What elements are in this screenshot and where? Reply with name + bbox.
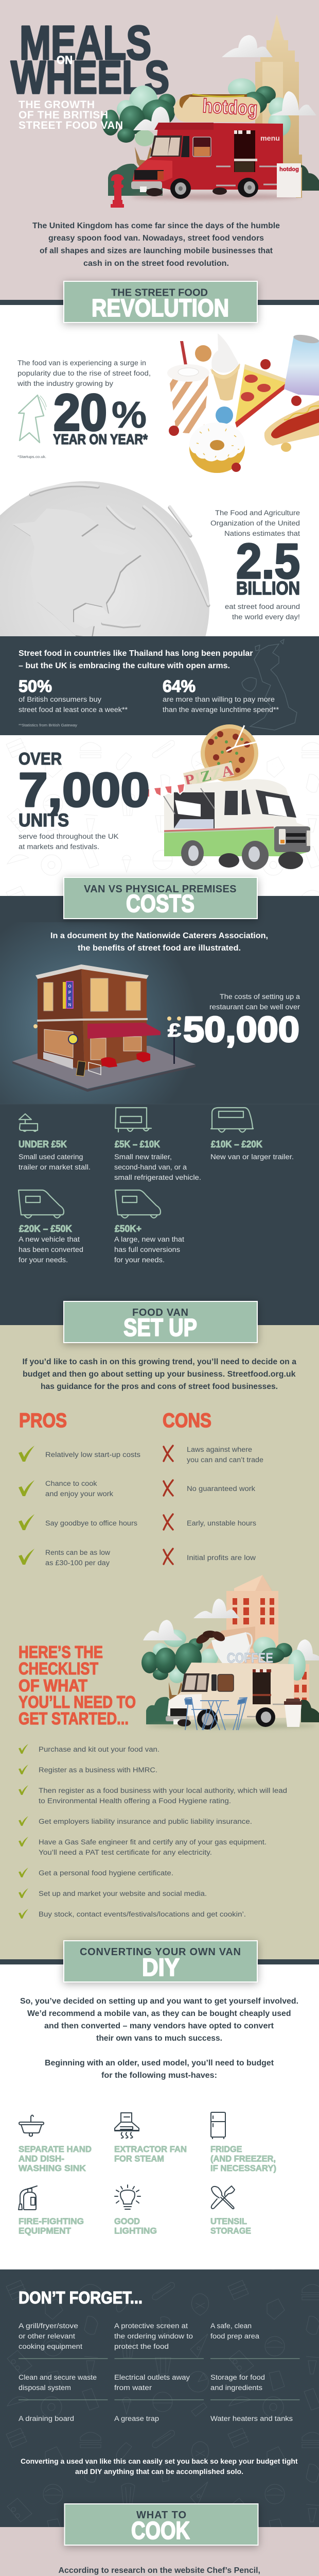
must-have: sink	[19, 2115, 92, 2173]
icon: growth arrow	[19, 395, 46, 443]
icon: cloud	[271, 91, 316, 115]
checklist item	[19, 1744, 160, 1754]
heading card: converting your own van DIY: DIY	[142, 1954, 180, 1981]
text block: food van surge: with the industry growing by	[17, 380, 113, 387]
heading card: what to cook: COOK	[131, 2517, 190, 2545]
stat: 64 percent	[163, 677, 279, 714]
cost tier: 5k to 10k	[114, 1108, 201, 1181]
bushes	[146, 1697, 319, 1724]
text block: set up intro	[23, 1358, 296, 1391]
text block: intro	[32, 222, 280, 268]
item	[210, 2322, 260, 2340]
roof	[36, 964, 149, 979]
panel: header background	[0, 0, 319, 300]
heading: checklist: HERE’S THE	[19, 1642, 103, 1662]
stat: 50000 pounds: £	[168, 1020, 181, 1041]
icon: van	[19, 1190, 64, 1218]
heading card: converting your own van DIY	[64, 1941, 257, 1982]
text block: set up intro: has guidance for the pros and cons of street food businesses.	[41, 1382, 278, 1391]
heading: checklist: YOU’LL NEED TO	[19, 1692, 136, 1711]
van body	[164, 779, 310, 834]
icon: fridge	[211, 2112, 225, 2139]
illustration: floating food	[164, 333, 319, 473]
checklist item: You’ll need a PAT test certificate for any electricity.	[39, 1849, 212, 1856]
text block: UK statement	[19, 649, 253, 670]
stat: over 7000 units: UNITS	[19, 810, 69, 831]
text block: budget advice: and DIY anything that can be accomplished solo.	[75, 2468, 243, 2476]
panel: revolution white background	[0, 305, 319, 636]
icon: cloud	[193, 1599, 240, 1618]
egg ball	[195, 345, 211, 362]
stat: 50 percent: street food at least once a week**	[19, 706, 128, 714]
van windows	[224, 789, 296, 818]
cost tier: 20k to 50k: A new vehicle that	[19, 1235, 80, 1243]
pro item: Rents can be as low	[45, 1549, 110, 1556]
stat: over 7000 units: OVER	[19, 749, 62, 768]
con item	[164, 1549, 256, 1564]
text block: serve food: at markets and festivals.	[19, 843, 99, 851]
trees	[141, 1630, 306, 1703]
must-have: utensil storage: UTENSIL	[210, 2216, 247, 2226]
pizza on roof	[201, 724, 258, 782]
soda can	[284, 333, 319, 396]
cream van	[166, 1663, 294, 1730]
cost tier: 20k to 50k: £20K – £50K	[19, 1224, 72, 1234]
text block: DIY intro: and then converted – many vendors have opted to convert	[44, 2022, 274, 2030]
must-have: fire fighting equipment: EQUIPMENT	[19, 2226, 72, 2236]
pro item: as £30-100 per day	[45, 1559, 110, 1567]
text block: intro: greasy spoon food van. Nowadays, street food vendors	[48, 234, 264, 243]
con item: you can and can’t trade	[187, 1456, 263, 1464]
list: cons	[163, 1410, 263, 1564]
text block: DIY intro: We’d recommend a mobile van, as they can be bought cheaply used	[27, 2009, 291, 2018]
heading card: van vs physical premises costs: VAN VS PHYSICAL PREMISES	[84, 884, 237, 895]
text block: FAO estimate: Nations estimates that	[224, 530, 300, 537]
red balls	[169, 359, 302, 472]
subtitle: THE GROWTH	[19, 99, 95, 111]
item: protect the food	[114, 2343, 169, 2350]
must-have: fridge: FRIDGE	[210, 2144, 242, 2154]
text block: UK statement: – but the UK is embracing the culture with open arms.	[19, 662, 230, 670]
walls	[38, 969, 84, 1070]
text block: DIY intro: So, you’ve decided on setting up and you want to get yourself involved.	[20, 1997, 298, 2006]
checklist item	[19, 1909, 246, 1919]
text block: budget advice	[21, 2458, 298, 2476]
tree right	[228, 78, 291, 137]
icon: bus	[211, 1108, 253, 1132]
text block: food van surge: popularity due to the rise of street food,	[17, 369, 151, 377]
heading: cons: CONS	[163, 1410, 211, 1432]
must-have: fridge	[210, 2112, 276, 2173]
heading card: food van set up: FOOD VAN	[132, 1307, 188, 1318]
stat: over 7000 units: 7,000	[19, 763, 150, 817]
icon: red food van: menu	[260, 134, 280, 142]
awning	[145, 784, 185, 798]
cost tier: 5k to 10k: second-hand van, or a	[114, 1163, 187, 1171]
checklist item: Get a personal food hygiene certificate.	[39, 1869, 173, 1877]
cost tier: 50k plus: £50K+	[115, 1224, 141, 1234]
text block: FAO estimate: The Food and Agriculture	[215, 509, 300, 517]
text block: DIY intro: their own vans to much success.	[96, 2034, 222, 2043]
subtitle: STREET FOOD VAN	[19, 120, 123, 131]
title: WHEELS	[11, 52, 169, 104]
must-have: good lighting: LIGHTING	[114, 2226, 157, 2236]
cost tier: 5k to 10k: small refrigerated vehicle.	[114, 1174, 201, 1181]
heading: checklist: GET STARTED...	[19, 1709, 129, 1728]
text block: serve food	[19, 833, 119, 851]
ice cream	[210, 333, 240, 401]
icon: cloud	[133, 107, 172, 130]
pro item	[19, 1446, 140, 1462]
icon: cloud	[222, 35, 273, 57]
footnote: startups: *Startups.co.uk.	[17, 454, 46, 459]
must-have: extractor fan: EXTRACTOR FAN	[114, 2144, 187, 2154]
panel: 7000 units patterned background	[0, 735, 319, 896]
text block: caterers association: In a document by the Nationwide Caterers Association,	[50, 931, 268, 940]
con item	[164, 1514, 256, 1530]
heading card: converting your own van DIY: CONVERTING YOUR OWN VAN	[80, 1946, 241, 1958]
open neon sign: O	[68, 984, 72, 989]
item	[114, 2322, 193, 2350]
cost tier: 5k to 10k: Small new trailer,	[114, 1153, 172, 1161]
tables	[101, 1052, 150, 1067]
blue ball	[216, 406, 233, 424]
text block: favourite dishes: According to research on the website Chef’s Pencil,	[59, 2566, 260, 2575]
pro item	[19, 1549, 110, 1567]
list: don't forget items	[19, 2322, 293, 2422]
ground shadow	[147, 1723, 316, 1728]
cost tier: under 5k: trailer or market stall.	[19, 1163, 91, 1171]
checklist item: Purchase and kit out your food van.	[39, 1745, 160, 1753]
icon: fire extinguisher	[19, 2186, 37, 2210]
text block: intro: of all shapes and sizes are launching mobile businesses that	[40, 246, 273, 256]
stat: 20 percent: %	[112, 395, 147, 436]
item: A draining board	[19, 2415, 74, 2422]
heading card: street food revolution: THE STREET FOOD	[111, 287, 208, 299]
must-have: utensil storage: STORAGE	[210, 2226, 251, 2236]
icon: spoon and fork	[211, 2186, 235, 2209]
con item: Laws against where	[187, 1446, 252, 1453]
text block: DIY intro	[20, 1997, 298, 2080]
must-have: good lighting	[114, 2185, 157, 2236]
wheels	[181, 840, 303, 870]
stat: over 7000 units	[19, 749, 150, 831]
pro item	[19, 1514, 137, 1530]
checklist item	[19, 1837, 267, 1856]
striped cup	[167, 364, 209, 433]
ground shadow	[131, 194, 301, 200]
straw	[180, 341, 188, 371]
icon: giant hotdog on roof	[174, 94, 260, 122]
con item	[164, 1480, 255, 1496]
text block: eat street food: the world every day!	[232, 613, 300, 621]
stat: 64 percent: 64%	[163, 677, 196, 696]
heading card: street food revolution: REVOLUTION	[92, 295, 229, 322]
con item: No guaranteed work	[187, 1485, 255, 1493]
cost tier: 50k plus: has full conversions	[114, 1246, 180, 1253]
footnote: british gateway: **Statistics from British Gateway	[19, 723, 77, 727]
stat: 50000 pounds: 50,000	[183, 1009, 299, 1049]
serving hatch	[164, 788, 215, 828]
text block: restaurant cost: restaurant can be well over	[209, 1003, 300, 1011]
stat: 20 percent	[53, 384, 148, 447]
stat: 2.5 billion: BILLION	[236, 578, 300, 599]
item	[19, 2374, 97, 2392]
con item: Initial profits are low	[187, 1554, 256, 1562]
heading: checklist: OF WHAT	[19, 1676, 87, 1695]
illustration: hotdog van scene	[102, 14, 319, 208]
cost tier: 20k to 50k: for your needs.	[19, 1256, 68, 1264]
upper windows	[44, 978, 140, 1011]
pro item: Say goodbye to office hours	[45, 1519, 137, 1527]
checklist item: Then register as a food business with your local authority, which will lead	[39, 1787, 287, 1794]
stat: 20 percent: YEAR ON YEAR*	[53, 431, 148, 447]
panel: costs dark background	[0, 896, 319, 1325]
illustration: coffee van scene	[141, 1575, 319, 1730]
title: MEALS	[20, 16, 151, 70]
cost tier: 10k to 20k	[210, 1108, 294, 1161]
cost tier: 50k plus: for your needs.	[114, 1256, 165, 1264]
title	[11, 16, 169, 104]
text block: budget advice: Converting a used van like this can easily set you back so keep your budget tight	[21, 2458, 298, 2466]
item: the ordering window to	[114, 2332, 193, 2340]
checklist item	[19, 1765, 157, 1774]
pizza slice	[235, 364, 290, 428]
stat: 50 percent: 50%	[19, 677, 52, 696]
cost tier: 10k to 20k: £10K – £20K	[211, 1139, 262, 1149]
cornice	[37, 1019, 148, 1021]
cost tier: 20k to 50k	[19, 1190, 83, 1264]
pizza sign: PIZZA	[183, 762, 235, 789]
pro item	[19, 1480, 113, 1498]
stat: 64 percent: are more than willing to pay more	[163, 696, 275, 703]
text block: eat street food: eat street food around	[225, 603, 300, 611]
icon: hotdog A-board sign	[277, 163, 302, 198]
open neon sign: N	[68, 1003, 72, 1007]
checklist item: Register as a business with HMRC.	[39, 1766, 157, 1774]
stat: 2.5 billion: 2.5	[236, 534, 300, 589]
subtitle: OF THE BRITISH	[19, 109, 108, 121]
bistro table and chairs	[185, 1698, 247, 1730]
icon: light bulb	[115, 2185, 140, 2209]
illustration: pizza van	[145, 724, 310, 870]
checklist item	[19, 1888, 207, 1898]
item: Clean and secure waste	[19, 2374, 97, 2381]
cost tier: 5k to 10k: £5K – £10K	[115, 1139, 160, 1149]
text block: eat street food	[225, 603, 300, 621]
icon: cloud	[289, 1639, 319, 1660]
text block: caterers association: the benefits of street food are illustrated.	[78, 944, 241, 953]
text block: food van surge	[17, 359, 151, 387]
cost tier: under 5k: UNDER £5K	[19, 1139, 67, 1149]
list: checklist	[19, 1744, 287, 1919]
stat: 64 percent: than the average lunchtime spend**	[163, 706, 279, 714]
platform	[12, 1061, 196, 1092]
illustration: globe	[0, 481, 210, 636]
text block: FAO estimate	[210, 509, 300, 537]
must-have: fridge: IF NECESSARY)	[210, 2163, 276, 2173]
icon: red food van	[131, 123, 283, 199]
con item: Early, unstable hours	[187, 1519, 256, 1527]
must-have: sink: SEPARATE HAND	[19, 2144, 92, 2154]
stat: 20 percent: 20	[54, 384, 107, 442]
donut	[189, 422, 245, 473]
text block: serve food: serve food throughout the UK	[19, 833, 119, 840]
must-have: sink: AND DISH-	[19, 2154, 64, 2164]
subtitle	[19, 99, 123, 131]
item: A safe, clean	[210, 2322, 252, 2330]
must-have: utensil storage	[210, 2186, 251, 2236]
stat: 50 percent: of British consumers buy	[19, 696, 101, 703]
illustration: restaurant building	[12, 964, 196, 1092]
checklist item: Have a Gas Safe engineer fit and certify any of your gas equipment.	[39, 1838, 267, 1846]
must-have: extractor fan: FOR STEAM	[114, 2154, 164, 2164]
icon: UK map outline	[242, 639, 297, 730]
item	[114, 2374, 190, 2392]
icon: fire hydrant	[111, 174, 124, 208]
must-have: extractor fan	[114, 2113, 187, 2164]
must-have: fire fighting equipment: FIRE-FIGHTING	[19, 2216, 84, 2226]
open neon sign: P	[68, 990, 72, 995]
text block: set up intro: budget and then go about setting up your business. Streetfood.org.uk	[23, 1370, 296, 1379]
panel: DIY white background	[0, 1964, 319, 2269]
icon: hotdog A-board sign: hotdog	[279, 166, 299, 173]
checklist item	[19, 1785, 287, 1805]
heading: checklist	[19, 1642, 136, 1728]
item: food prep area	[210, 2332, 260, 2340]
cost tier: under 5k: Small used catering	[19, 1153, 83, 1161]
cost tier: 50k plus: A large, new van that	[114, 1235, 184, 1243]
heading card: street food revolution	[64, 281, 257, 323]
cost tier: 50k plus	[114, 1190, 184, 1264]
panel: UK stats dark background	[0, 636, 319, 735]
hotdog	[264, 400, 319, 452]
item: or other relevant	[19, 2332, 75, 2340]
item: Storage for food	[210, 2374, 265, 2381]
heading: pros: PROS	[19, 1410, 67, 1432]
awning	[87, 1023, 161, 1039]
takeaway cup	[284, 1699, 302, 1727]
tree left	[102, 86, 175, 168]
text block: food van surge: The food van is experiencing a surge in	[17, 359, 146, 367]
checklist item	[19, 1868, 173, 1877]
icon: sink	[19, 2115, 44, 2136]
text block: DIY intro: Beginning with an older, used model, you’ll need to budget	[45, 2059, 274, 2067]
icon: giant hotdog on roof: hotdog	[202, 95, 258, 120]
stat: 50 percent	[19, 677, 128, 714]
checklist item: Buy stock, contact events/festivals/locations and get cookin’.	[39, 1910, 246, 1918]
list: pros	[19, 1410, 140, 1567]
checklist item: to Environmental Health offering a Food Hygiene rating.	[39, 1797, 231, 1805]
buildings	[206, 1575, 309, 1708]
text block: DIY intro: for the following must-haves:	[101, 2071, 217, 2080]
heading card: what to cook	[65, 2504, 258, 2545]
must-have: good lighting: GOOD	[114, 2216, 140, 2226]
text block: intro: The United Kingdom has come far since the days of the humble	[32, 222, 280, 230]
panel: don't forget dark background	[0, 2269, 319, 2527]
text block: intro: cash in on the street food revolution.	[83, 259, 229, 268]
item: cooking equipment	[19, 2343, 82, 2350]
item: A grill/fryer/stove	[19, 2322, 78, 2330]
con item	[164, 1446, 263, 1464]
bushes	[108, 164, 319, 196]
icon: coffee cup and beans	[194, 1630, 252, 1663]
checklist item	[19, 1816, 252, 1826]
text block: restaurant cost: The costs of setting up a	[220, 993, 300, 1001]
icon: market cart	[19, 1114, 38, 1131]
heading card: food van set up: SET UP	[123, 1314, 197, 1342]
text block: restaurant cost	[209, 993, 300, 1011]
item: Water heaters and tanks	[210, 2415, 293, 2422]
item: from water	[114, 2384, 152, 2392]
heading card: what to cook: WHAT TO	[136, 2510, 186, 2521]
checklist item: Set up and market your website and social media.	[39, 1890, 207, 1897]
ground floor windows	[44, 1029, 141, 1060]
icon: extractor hood	[115, 2113, 139, 2138]
item	[210, 2374, 265, 2392]
text block: set up intro: If you’d like to cash in on this growing trend, you’ll need to decide on a	[23, 1358, 296, 1366]
checklist item: Get employers liability insurance and public liability insurance.	[39, 1818, 252, 1825]
pro item: Chance to cook	[45, 1480, 97, 1487]
cost tier: under 5k	[19, 1114, 91, 1171]
title: ON	[57, 54, 73, 66]
open neon sign: E	[68, 996, 72, 1001]
icon: trailer	[115, 1108, 151, 1132]
text block: UK statement: Street food in countries like Thailand has long been popular	[19, 649, 253, 658]
must-have: fire fighting equipment	[19, 2186, 84, 2236]
panel: set up khaki background	[0, 1325, 319, 1959]
item: A grease trap	[114, 2415, 159, 2422]
icon: art deco tower	[255, 14, 302, 180]
grille	[274, 826, 310, 852]
text block: caterers association	[50, 931, 268, 953]
must-have: fridge: (AND FREEZER,	[210, 2154, 276, 2164]
heading card: van vs physical premises costs	[64, 877, 257, 919]
item: A protective screen at	[114, 2322, 188, 2330]
item: and ingredients	[210, 2384, 262, 2392]
item	[19, 2322, 82, 2350]
open neon sign	[63, 981, 73, 1009]
item: Electrical outlets away	[114, 2374, 190, 2381]
icon: cloud	[143, 1620, 183, 1640]
must-have: sink: WASHING SINK	[19, 2163, 86, 2173]
lamp post	[33, 1016, 181, 1064]
text block: FAO estimate: Organization of the United	[210, 519, 300, 527]
panel: what to cook pink background	[0, 2527, 319, 2576]
cost tier: 10k to 20k: New van or larger trailer.	[210, 1153, 294, 1161]
heading: don't forget: DON’T FORGET...	[19, 2288, 143, 2307]
coffee sign: COFFEE	[227, 1650, 273, 1666]
cost tier: 20k to 50k: has been converted	[19, 1246, 83, 1253]
icon: large van	[115, 1190, 161, 1218]
pro item: Relatively low start-up costs	[45, 1451, 140, 1459]
heading card: van vs physical premises costs: COSTS	[126, 890, 194, 918]
pro item: and enjoy your work	[45, 1490, 113, 1498]
heading: checklist: CHECKLIST	[19, 1659, 98, 1678]
heading card: food van set up	[64, 1301, 257, 1343]
item: disposal system	[19, 2384, 71, 2392]
